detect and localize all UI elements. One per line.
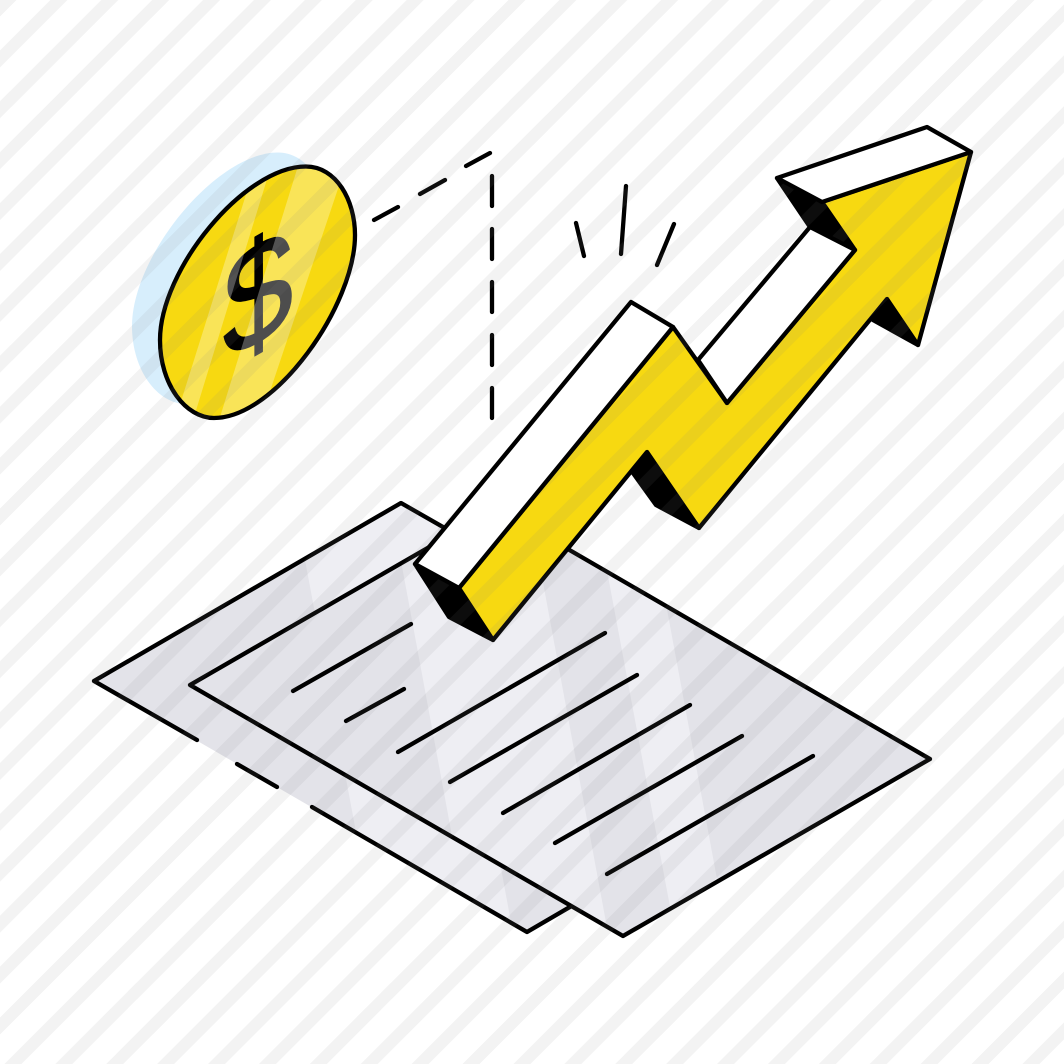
coin (132, 150, 355, 430)
document text lines (293, 624, 813, 874)
spark lines above arrow (576, 186, 674, 265)
back document sheet (92, 500, 572, 934)
arrow dark faces (415, 178, 918, 640)
coin highlights (182, 168, 338, 416)
arrow white top faces (415, 127, 971, 588)
front document sheet (188, 545, 932, 938)
dashed connector line (374, 153, 492, 418)
arrow yellow face (459, 152, 971, 640)
coin shadow (132, 152, 327, 404)
dollar sign: $ (223, 192, 293, 396)
coin outline (160, 166, 355, 418)
coin face (160, 166, 355, 418)
